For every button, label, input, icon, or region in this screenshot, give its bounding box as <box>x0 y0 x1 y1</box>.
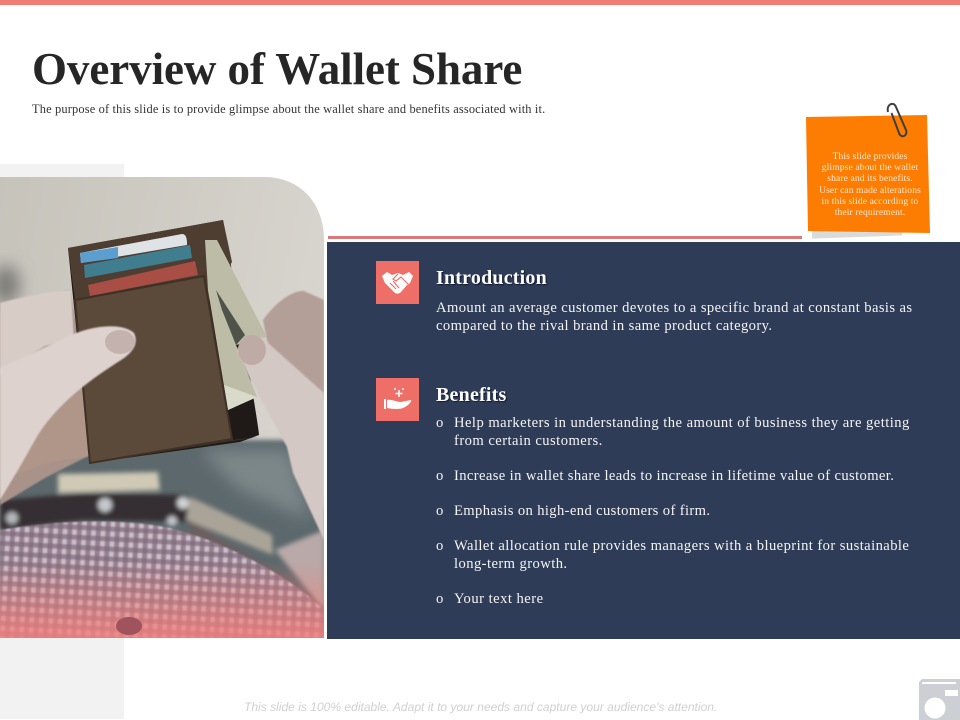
wallet front pocket <box>75 276 232 463</box>
left hand <box>0 290 90 505</box>
shirt <box>0 521 324 640</box>
benefits list <box>436 415 910 607</box>
shirt button <box>116 617 142 635</box>
note paper <box>806 115 930 233</box>
wallet back <box>68 220 259 463</box>
bullet 4 <box>436 538 909 572</box>
note text: their requirement. <box>835 207 905 218</box>
bullet 3 <box>436 503 710 519</box>
banknotes <box>205 240 267 410</box>
note text: User can made alterations <box>819 185 921 196</box>
bullet 3: o <box>436 503 444 519</box>
bank cards <box>80 234 187 263</box>
footer note: This slide is 100% editable. Adapt it to your needs and capture your audience's attention. <box>244 700 717 714</box>
icon: hand with sparkle <box>376 378 419 421</box>
note text: share and its benefits. <box>827 173 913 184</box>
introduction text: Amount an average customer devotes to a specific brand at constant basis as <box>436 300 913 316</box>
benefits list: Help marketers in understanding the amount of business they are getting <box>454 415 910 431</box>
subtitle: The purpose of this slide is to provide glimpse about the wallet share and benefits associated with it. <box>32 102 545 116</box>
benefits list: Emphasis on high-end customers of firm. <box>454 503 710 519</box>
photo backdrop <box>0 177 324 576</box>
benefits list: from certain customers. <box>454 433 603 449</box>
grey backing panel <box>0 164 124 719</box>
benefits list: Increase in wallet share leads to increase in lifetime value of customer. <box>454 468 894 484</box>
top accent bar <box>0 0 960 5</box>
heading: benefits: Benefits <box>436 384 506 406</box>
trousers <box>0 440 324 640</box>
bullet 1 <box>436 415 910 449</box>
title: Overview of Wallet Share <box>32 44 522 94</box>
navy content panel <box>327 242 960 639</box>
photo: hands holding wallet <box>0 177 324 638</box>
icon: camera watermark <box>919 679 960 720</box>
note text <box>819 151 921 218</box>
icon: handshake <box>376 261 419 304</box>
right hand fingers <box>263 291 324 400</box>
note text: This slide provides <box>833 151 907 162</box>
benefits list: Wallet allocation rule provides managers with a blueprint for sustainable <box>454 538 909 554</box>
dark shadow <box>0 265 20 305</box>
left thumb <box>0 326 136 500</box>
introduction text <box>436 300 913 334</box>
icon: paperclip <box>886 102 908 138</box>
bullet 1: o <box>436 415 444 431</box>
bullet 2: o <box>436 468 444 484</box>
bullet 5: o <box>436 591 444 607</box>
sticky note <box>806 102 930 238</box>
heading: introduction: Introduction <box>436 267 547 289</box>
note shadow <box>812 224 902 239</box>
bullet 4: o <box>436 538 444 554</box>
bullet 2 <box>436 468 894 484</box>
introduction text: compared to the rival brand in same product category. <box>436 318 772 334</box>
right thumb <box>237 337 324 540</box>
bullet 5 <box>436 591 544 607</box>
pink rule <box>328 236 802 239</box>
benefits list: long-term growth. <box>454 556 568 572</box>
belt <box>0 469 324 610</box>
note text: in this slide according to <box>822 196 918 207</box>
note text: glimpse about the wallet <box>822 162 918 173</box>
pale area under right hand <box>275 530 324 610</box>
benefits list: Your text here <box>454 591 544 607</box>
